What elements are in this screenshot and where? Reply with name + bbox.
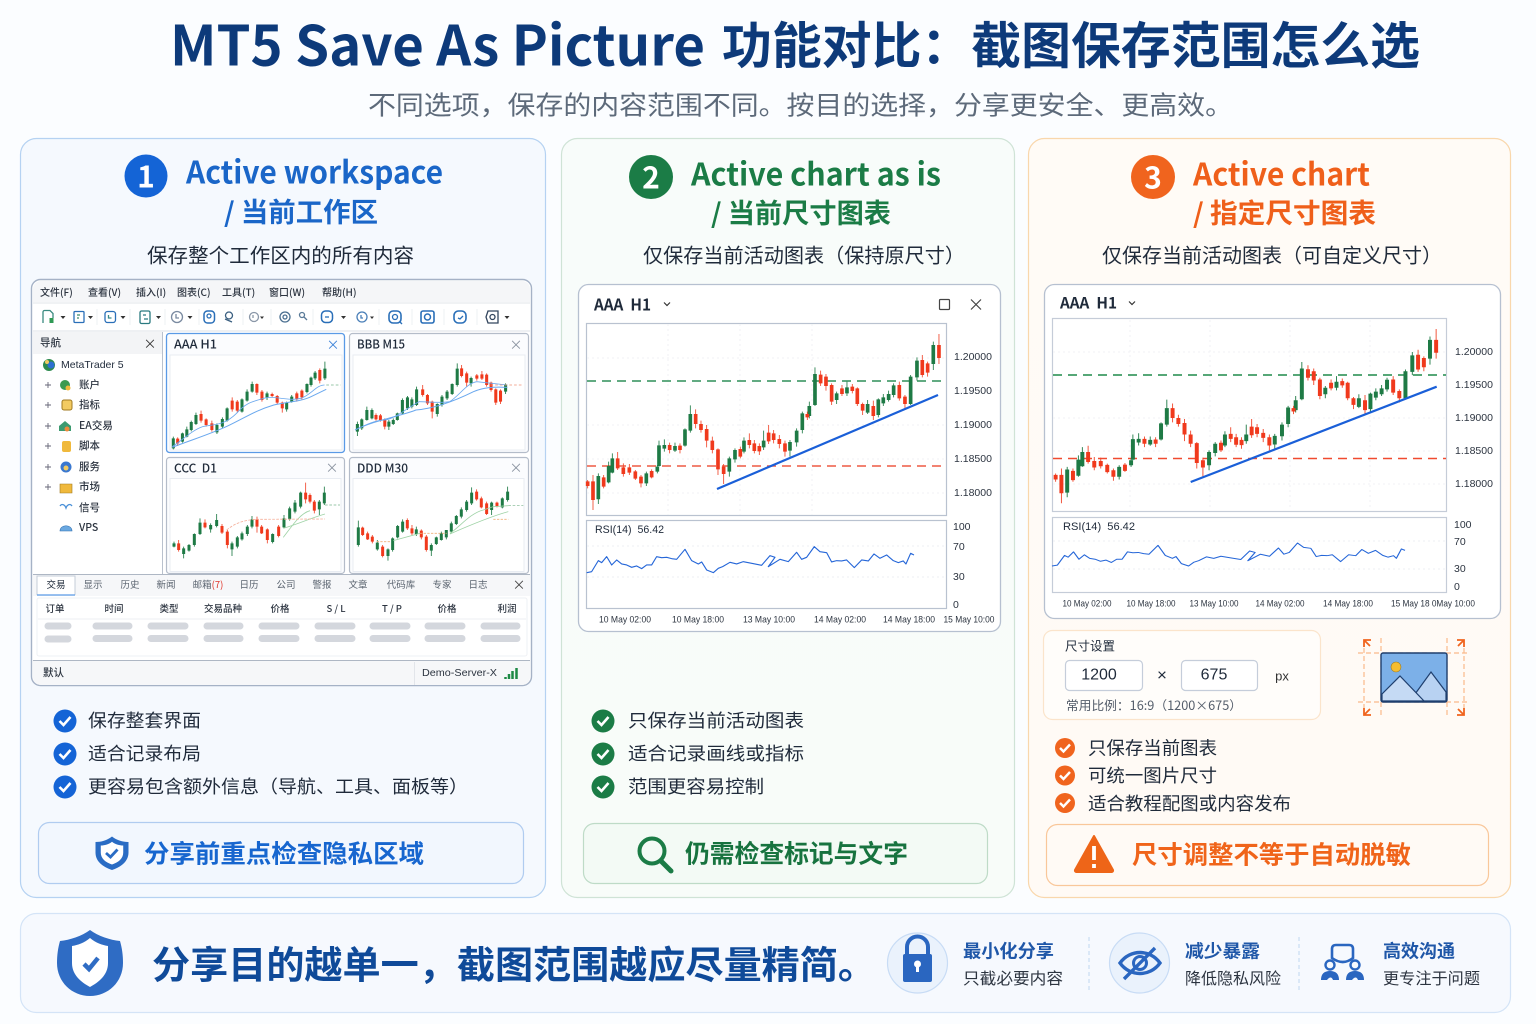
menu bar: 帮助(H) — [322, 284, 357, 299]
chart window BBB M15 — [350, 334, 528, 452]
badge 3: 3 — [1144, 154, 1162, 198]
time axis: 14 May 02:00 — [1256, 598, 1304, 610]
chart window BBB M15: × — [509, 334, 523, 354]
panel: active chart custom size — [1028, 138, 1510, 898]
RSI panel: 100 — [1454, 519, 1472, 531]
menu bar: 插入(I) — [136, 284, 166, 299]
benefit: reduce exposure: 减少暴露 — [1185, 938, 1260, 964]
price axis: 1.20000 — [1455, 346, 1493, 358]
menu bar — [40, 284, 357, 299]
toolbox tabs: 交易 — [46, 577, 66, 591]
price axis: 1.19000 — [954, 419, 992, 431]
chart window: custom size: AAA H1 — [1059, 292, 1117, 314]
RSI panel — [586, 520, 971, 611]
toolbox tabs: 邮箱(7) — [193, 577, 223, 591]
toolbox tabs: 文章 — [348, 577, 368, 591]
panel description: 仅保存当前活动图表（保持原尺寸） — [643, 240, 965, 268]
status bar — [33, 660, 530, 685]
navigator panel: 市场 — [79, 479, 100, 494]
chart window: custom size — [1044, 284, 1500, 618]
panel description: 保存整个工作区内的所有内容 — [147, 240, 414, 268]
size settings box: 尺寸设置 — [1065, 636, 1115, 654]
toolbox tabs: 专家 — [432, 577, 452, 591]
price axis: 1.20000 — [954, 351, 992, 363]
chart window DDD M30: DDD M30 — [357, 460, 408, 476]
time axis: 13 May 10:00 — [743, 614, 795, 626]
RSI panel: 70 — [1454, 536, 1466, 548]
time axis: 15 May 10:00 — [944, 614, 994, 626]
menu bar: 查看(V) — [88, 284, 121, 299]
heading: active chart as is: Active chart as is — [690, 150, 941, 194]
MT5 terminal window — [32, 280, 532, 686]
takeaway text: 分享目的越单一，截图范围越应尽量精简。 — [152, 934, 876, 990]
trade table: 交易品种 — [204, 601, 242, 615]
toolbox tabs: 历史 — [120, 577, 140, 591]
time axis — [599, 614, 994, 626]
trade table: 利润 — [497, 601, 517, 615]
checklist: workspace: 保存整套界面 — [88, 707, 201, 733]
checklist: custom size: 适合教程配图或内容发布 — [1088, 790, 1291, 816]
panel: active chart as is — [562, 138, 1014, 898]
checklist: as is: 范围更容易控制 — [628, 773, 764, 799]
toolbox tabs: × — [512, 574, 526, 594]
callout: check marks and text: 仍需检查标记与文字 — [685, 834, 908, 870]
toolbox tabs: 日历 — [239, 577, 259, 591]
navigator panel: 服务 — [79, 459, 100, 474]
panel: active workspace — [20, 138, 546, 898]
icon: shield — [96, 836, 128, 870]
chart window AAA H1 — [166, 334, 344, 452]
price axis: 1.19000 — [1455, 412, 1493, 424]
time axis: 10 May 18:00 — [1126, 598, 1176, 610]
time axis: 13 May 10:00 — [1190, 598, 1238, 610]
price axis — [954, 351, 992, 499]
badge 1: 1 — [137, 152, 155, 196]
trade table: 订单 — [45, 601, 65, 615]
menu bar: 工具(T) — [222, 284, 255, 299]
heading: active chart: / 指定尺寸图表 — [1193, 192, 1376, 231]
checklist: workspace: 更容易包含额外信息（导航、工具、面板等） — [88, 773, 468, 799]
title: MT5 Save As Picture — [170, 2, 705, 82]
benefit: minimal sharing — [888, 933, 1063, 993]
heading: active workspace: / 当前工作区 — [224, 191, 378, 230]
chart window: as is — [578, 284, 1000, 632]
callout: check marks and text — [584, 824, 988, 884]
callout: resize is not redaction — [1046, 824, 1488, 886]
title — [170, 2, 1420, 82]
RSI panel: 30 — [1454, 563, 1466, 575]
RSI panel — [1052, 518, 1472, 593]
trade table: 时间 — [104, 601, 124, 615]
checklist: custom size: 只保存当前图表 — [1088, 734, 1217, 760]
benefit: reduce exposure: 降低隐私风险 — [1185, 965, 1281, 989]
toolbox tabs: 新闻 — [156, 577, 176, 591]
trade table: 价格 — [437, 601, 457, 615]
navigator panel: MetaTrader 5 — [61, 359, 124, 371]
heading: active workspace — [185, 148, 443, 230]
benefit: efficient communication: 更专注于问题 — [1383, 965, 1480, 989]
RSI panel: 100 — [953, 521, 971, 533]
RSI panel: RSI(14) 56.42 — [1063, 521, 1135, 533]
benefit: efficient communication — [1321, 938, 1480, 989]
candlestick plot — [1052, 318, 1446, 512]
benefit: minimal sharing: 最小化分享 — [963, 938, 1054, 964]
trade table — [37, 598, 527, 656]
time axis: 14 May 02:00 — [814, 614, 866, 626]
RSI panel: RSI(14) 56.42 — [595, 524, 664, 536]
time axis: 10 May 02:00 — [1062, 598, 1112, 610]
size settings box: 常用比例：16:9（1200×675） — [1066, 695, 1242, 714]
trade table: S / L — [326, 601, 346, 615]
trade table: 类型 — [159, 601, 179, 615]
navigator icons — [43, 359, 72, 531]
toolbar icons — [43, 309, 510, 325]
navigator panel — [33, 332, 162, 574]
time axis — [1062, 598, 1475, 610]
checklist: as is — [592, 707, 804, 799]
price axis: 1.18500 — [954, 453, 992, 465]
price axis: 1.19500 — [1455, 379, 1493, 391]
navigator panel: × — [143, 334, 157, 352]
chart window DDD M30: × — [509, 458, 523, 476]
callout: resize is not redaction: 尺寸调整不等于自动脱敏 — [1132, 836, 1411, 872]
badge 3 — [1131, 154, 1175, 199]
heading: active chart: Active chart — [1192, 150, 1370, 194]
badge 2: 2 — [642, 154, 660, 198]
icon: warning triangle — [1075, 836, 1113, 872]
size settings box: × — [1157, 666, 1167, 684]
chart window BBB M15: BBB M15 — [357, 336, 405, 352]
status bar: 默认 — [43, 665, 64, 680]
icon: magnifier — [640, 838, 671, 871]
time axis: 10 May 18:00 — [672, 614, 724, 626]
callout: privacy check: 分享前重点检查隐私区域 — [144, 834, 424, 870]
checklist: workspace: 适合记录布局 — [88, 740, 201, 766]
chart window CCC D1 — [166, 458, 344, 574]
benefit: reduce exposure — [1110, 933, 1281, 993]
panel description: 仅保存当前活动图表（可自定义尺寸） — [1102, 240, 1442, 268]
toolbox tabs: 日志 — [468, 577, 488, 591]
subtitle: 不同选项，保存的内容范围不同。按目的选择，分享更安全、更高效。 — [368, 86, 1233, 122]
chart window AAA H1: AAA H1 — [174, 336, 217, 352]
status bar: Demo-Server-X — [422, 667, 497, 679]
price axis: 1.18000 — [954, 487, 992, 499]
RSI panel: 0 — [1454, 581, 1460, 593]
price axis: 1.18500 — [1455, 445, 1493, 457]
trade table: T / P — [382, 601, 402, 615]
candlestick plot — [586, 324, 946, 516]
menu bar: 文件(F) — [40, 284, 73, 299]
toolbox tabs: 公司 — [276, 577, 296, 591]
RSI panel: 0 — [953, 599, 959, 611]
heading: active chart as is — [690, 150, 941, 231]
callout: privacy check — [38, 822, 524, 884]
navigator panel: 导航 — [40, 335, 61, 350]
time axis: 14 May 18:00 — [883, 614, 935, 626]
navigator panel: VPS — [78, 520, 98, 535]
toolbox tabs: 警报 — [312, 577, 332, 591]
navigator panel: EA交易 — [79, 418, 113, 433]
price axis: 1.18000 — [1455, 478, 1493, 490]
chart window AAA H1: × — [326, 334, 340, 354]
icon: resizable image — [1358, 638, 1470, 716]
time axis: 10 May 02:00 — [599, 614, 651, 626]
time axis: 15 May 18 0May 10:00 — [1391, 598, 1475, 610]
benefit: efficient communication: 高效沟通 — [1383, 938, 1455, 964]
checklist: as is: 只保存当前活动图表 — [628, 707, 804, 733]
size settings box — [1044, 630, 1320, 720]
navigator panel: 信号 — [79, 500, 100, 515]
navigator panel: 指标 — [79, 397, 100, 412]
benefit: minimal sharing: 只截必要内容 — [963, 965, 1063, 989]
chart window CCC D1: CCC D1 — [174, 460, 217, 476]
bottom takeaway bar — [20, 914, 1510, 1012]
size settings box: 1200 — [1081, 666, 1117, 684]
checklist: custom size — [1055, 734, 1291, 816]
badge 2 — [629, 154, 673, 199]
toolbox tabs: 代码库 — [387, 577, 416, 591]
checklist: as is: 适合记录画线或指标 — [628, 740, 804, 766]
badge 1 — [124, 152, 168, 198]
heading: active workspace: Active workspace — [185, 148, 443, 192]
navigator panel: 账户 — [79, 377, 100, 392]
checklist: custom size: 可统一图片尺寸 — [1088, 762, 1217, 788]
menu bar: 图表(C) — [177, 284, 211, 299]
heading: active chart — [1192, 150, 1376, 231]
price axis: 1.19500 — [954, 385, 992, 397]
price axis — [1455, 346, 1493, 490]
trade table: 价格 — [270, 601, 290, 615]
size settings box: 675 — [1201, 666, 1227, 684]
toolbox tabs — [33, 574, 530, 596]
heading: active chart as is: / 当前尺寸图表 — [711, 192, 891, 231]
chart window CCC D1: × — [325, 458, 339, 476]
RSI panel: 30 — [953, 571, 965, 583]
chart window: as is: AAA H1 — [593, 292, 651, 316]
icon: large shield — [57, 930, 123, 996]
chart window DDD M30 — [350, 458, 528, 574]
title: 功能对比：截图保存范围怎么选 — [722, 6, 1420, 78]
time axis: 14 May 18:00 — [1323, 598, 1373, 610]
size settings box: px — [1275, 668, 1289, 684]
RSI panel: 70 — [953, 541, 965, 553]
navigator panel: 脚本 — [79, 438, 100, 453]
menu bar: 窗口(W) — [269, 284, 305, 299]
toolbox tabs: 显示 — [83, 577, 103, 591]
checklist: workspace — [54, 707, 468, 799]
